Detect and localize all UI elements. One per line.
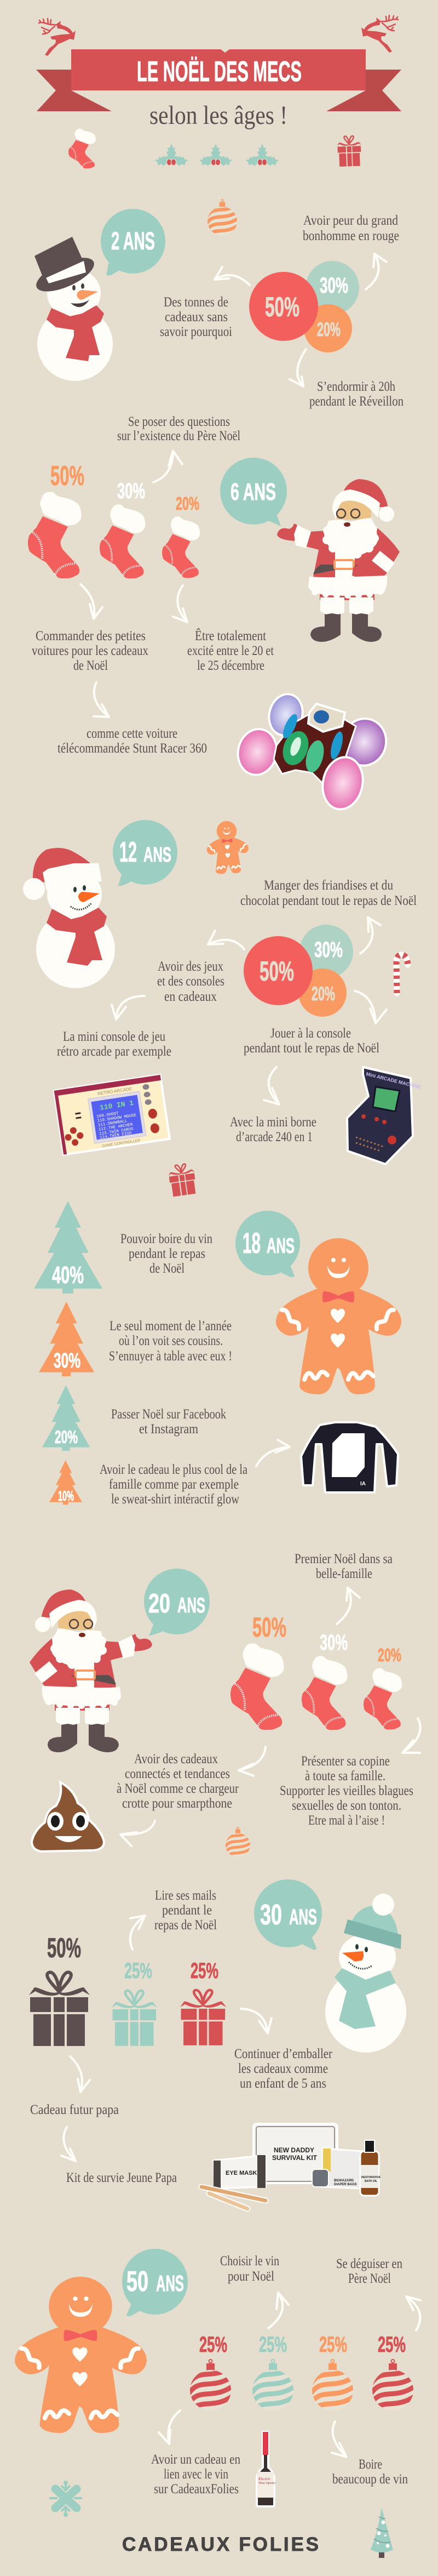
text blocks: et Instagram — [139, 1422, 198, 1437]
product: new daddy survival kit: SURVIVAL KIT — [272, 2154, 318, 2162]
text blocks: le 25 décembre — [197, 658, 264, 673]
speech bubble 12 ans: ANS — [143, 844, 171, 867]
product: wine bottle opener: Electric — [258, 2477, 271, 2481]
stockings chart: 50% — [252, 1612, 286, 1643]
icon: small gingerbread — [205, 820, 250, 875]
icon: orange bauble — [224, 1827, 252, 1866]
icon: orange bauble — [205, 200, 239, 247]
stockings chart — [230, 1612, 402, 1730]
product: mini arcade cabinet — [347, 1067, 422, 1164]
text blocks: excité entre le 20 et — [187, 643, 274, 658]
icon: starred tree — [371, 2507, 393, 2558]
text blocks: S’endormir à 20h — [317, 379, 395, 394]
text blocks: sexuelles de son tonton. — [292, 1798, 401, 1813]
arrows — [120, 1588, 420, 1846]
stockings chart: 30% — [320, 1631, 348, 1655]
text blocks: Manger des friandises et du — [264, 878, 393, 893]
product: retro arcade console: 110.SHADOW MOUSE — [97, 1113, 137, 1124]
baubles chart: 25% — [319, 2333, 347, 2357]
text blocks: beaucoup de vin — [332, 2472, 408, 2487]
icon: reindeer left — [39, 19, 76, 56]
text blocks: S’ennuyer à table avec eux ! — [109, 1349, 232, 1364]
product: wine bottle opener — [257, 2432, 276, 2506]
arrows — [159, 2293, 420, 2457]
text blocks: Premier Noël dans sa — [295, 1552, 393, 1566]
panel: 30 ans — [29, 1879, 406, 2209]
icon: reindeer right — [361, 15, 398, 53]
icon: gift — [167, 1162, 198, 1197]
text blocks — [151, 2254, 408, 2497]
icon: snowflake — [49, 2481, 82, 2517]
product: new daddy survival kit: BATH OIL — [365, 2180, 377, 2183]
text blocks: Avec la mini borne — [230, 1115, 316, 1130]
speech bubble 30 ans: 30 — [260, 1899, 282, 1931]
gifts chart: 25% — [191, 1959, 218, 1983]
panel: 12 ans — [23, 820, 422, 1197]
gingerbread man — [15, 2277, 147, 2433]
product: retro arcade console: RETRO ARCADE — [97, 1086, 132, 1096]
text blocks: d’arcade 240 en 1 — [236, 1130, 313, 1144]
stockings chart: 20% — [378, 1645, 401, 1665]
speech bubble 50 ans — [122, 2249, 188, 2316]
footer logo: CADEAUX FOLIES — [122, 2534, 319, 2555]
text blocks: de Noël — [73, 658, 108, 673]
tree chart: 30% — [54, 1349, 80, 1372]
text blocks: Kit de survie Jeune Papa — [66, 2170, 177, 2185]
speech bubble 12 ans: 12 — [119, 836, 137, 868]
icon: candy cane — [396, 955, 408, 993]
product: retro arcade console — [54, 1075, 170, 1155]
product: glow sweatshirt: IA — [360, 1481, 366, 1487]
text blocks: Etre mal à l’aise ! — [308, 1813, 385, 1828]
speech bubble 20 ans: ANS — [177, 1594, 205, 1617]
tree chart — [34, 1201, 102, 1504]
tree chart: 10% — [58, 1489, 74, 1504]
text blocks — [117, 1552, 413, 1828]
text blocks: Boire — [359, 2457, 382, 2472]
text blocks: où l’on voit ses cousins. — [119, 1333, 223, 1348]
text blocks: pendant le — [162, 1903, 212, 1918]
percent circles: 50% — [260, 956, 294, 987]
text blocks: bonhomme en rouge — [303, 229, 399, 243]
text blocks: pour Noël — [228, 2269, 274, 2284]
title banner — [36, 49, 401, 111]
product: new daddy survival kit: RESTORATIVE — [361, 2176, 381, 2179]
text: question: Se poser des questions — [128, 414, 230, 429]
text blocks: Le seul moment de l’année — [110, 1319, 232, 1333]
baubles chart — [187, 2333, 416, 2426]
panel: 50 ans — [15, 2249, 420, 2517]
product: retro arcade console: 114.TWIN FISH — [100, 1131, 132, 1141]
speech bubble 2 ans — [101, 209, 165, 276]
text blocks: Supporter les vieilles blagues — [280, 1783, 413, 1798]
gifts chart: 50% — [47, 1933, 81, 1963]
speech bubble 12 ans — [113, 820, 177, 886]
gifts chart — [29, 1933, 226, 2046]
speech bubble 6 ans: 6 ANS — [230, 478, 276, 505]
gifts chart: 25% — [124, 1959, 152, 1983]
baubles chart: 25% — [259, 2333, 287, 2357]
text blocks: en cadeaux — [164, 989, 217, 1004]
text blocks: Père Noël — [348, 2271, 391, 2286]
text blocks: pendant le Réveillon — [309, 394, 404, 409]
text blocks: Avoir des cadeaux — [134, 1752, 218, 1766]
stockings chart: 50% — [50, 460, 84, 491]
stockings chart — [28, 460, 200, 578]
icons: holly row — [154, 144, 279, 166]
santa mirrored — [30, 1589, 152, 1752]
product: glow sweatshirt — [301, 1422, 398, 1492]
text blocks: pendant tout le repas de Noël — [244, 1041, 379, 1056]
text blocks: Continuer d’emballer — [234, 2047, 333, 2061]
text blocks: rétro arcade par exemple — [57, 1044, 171, 1059]
text blocks: un enfant de 5 ans — [240, 2076, 326, 2091]
text blocks: à Noël comme ce chargeur — [117, 1781, 239, 1796]
percent circles: 20% — [312, 983, 335, 1005]
product: new daddy survival kit: BIOHAZARD — [334, 2179, 354, 2182]
stockings chart: 20% — [176, 493, 199, 514]
text blocks: Cadeau futur papa — [30, 2102, 119, 2117]
product: retro arcade console: 112.THE ARCHER — [99, 1122, 134, 1132]
text blocks: télécommandée Stunt Racer 360 — [57, 741, 207, 756]
panel: 6 ans — [28, 414, 400, 813]
baubles chart: 25% — [199, 2333, 227, 2357]
speech bubble 18 ans: ANS — [267, 1234, 295, 1258]
text blocks: Avoir un cadeau en — [151, 2452, 240, 2467]
text blocks: de Noël — [149, 1261, 185, 1276]
text blocks: La mini console de jeu — [63, 1029, 165, 1044]
text blocks: à toute sa famille. — [305, 1769, 385, 1783]
product: retro arcade console: 111.SNOWBALL — [97, 1119, 128, 1128]
product: poop emoji charger — [32, 1782, 104, 1851]
baubles chart: 25% — [378, 2333, 406, 2357]
percent circles: 20% — [317, 319, 341, 340]
panel: 18 ans — [34, 1201, 401, 1507]
text: question — [117, 414, 240, 443]
text blocks: comme cette voiture — [87, 726, 177, 741]
text blocks: famille comme par exemple — [109, 1477, 239, 1492]
tree chart: 20% — [55, 1427, 78, 1447]
product: retro arcade console: 113.TWIN CARDS — [99, 1127, 134, 1137]
speech bubble 18 ans — [235, 1211, 300, 1277]
text blocks: Pouvoir boire du vin — [120, 1232, 212, 1246]
text blocks: Commander des petites — [36, 629, 146, 643]
product: retro arcade console: 109.SHOOT — [96, 1112, 119, 1119]
gingerbread man — [276, 1238, 401, 1394]
speech bubble 50 ans: ANS — [156, 2271, 184, 2296]
percent circles — [249, 261, 359, 352]
arrow — [256, 1440, 290, 1466]
product: new daddy survival kit: EYE MASK — [226, 2170, 257, 2176]
product: mini arcade cabinet: Mini ARCADE MACHINE — [366, 1071, 422, 1090]
snowman with santa hat — [23, 848, 115, 988]
text blocks: Jouer à la console — [270, 1026, 351, 1041]
text blocks: cadeaux sans — [165, 310, 228, 324]
panel: 2 ans — [32, 209, 404, 409]
text blocks: Présenter sa copine — [301, 1754, 390, 1769]
stockings chart: 30% — [117, 479, 145, 503]
text blocks: les cadeaux comme — [238, 2061, 328, 2076]
text blocks — [100, 1232, 247, 1507]
text blocks — [30, 1888, 333, 2185]
product: wine bottle opener: Wine Opener — [258, 2482, 276, 2485]
text blocks — [32, 628, 274, 756]
percent circles — [244, 925, 353, 1017]
speech bubble 30 ans: ANS — [289, 1905, 317, 1929]
text blocks: Se déguiser en — [336, 2256, 402, 2271]
percent circles: 30% — [314, 938, 343, 962]
percent circles: 30% — [320, 273, 348, 298]
text blocks: savoir pourquoi — [160, 324, 232, 339]
text blocks: le sweat-shirt intéractif glow — [111, 1492, 239, 1507]
tree chart: 40% — [52, 1262, 84, 1289]
text blocks: et des consoles — [157, 974, 224, 989]
text blocks: voitures pour les cadeaux — [32, 643, 148, 658]
arrows — [215, 254, 387, 386]
snowman with top hat — [32, 237, 113, 381]
text blocks: pendant le repas — [129, 1246, 205, 1261]
text blocks: belle-famille — [316, 1566, 372, 1581]
text blocks: repas de Noël — [154, 1918, 217, 1933]
product: new daddy survival kit — [201, 2124, 381, 2209]
text blocks: connectés et tendances — [125, 1766, 230, 1781]
text blocks: Choisir le vin — [220, 2254, 279, 2269]
snowman with teal hat — [325, 1894, 406, 2053]
text blocks: Avoir peur du grand — [303, 213, 398, 228]
text: question: sur l’existence du Père Noël — [117, 429, 240, 443]
title text: LE NOËL DES MECS — [137, 56, 302, 88]
text blocks: lien avec le vin — [164, 2467, 228, 2482]
text blocks — [57, 878, 417, 1144]
speech bubble 50 ans: 50 — [126, 2266, 148, 2298]
icon: small gift — [337, 135, 362, 167]
arrows — [61, 1916, 272, 2161]
text blocks: Passer Noël sur Facebook — [111, 1407, 226, 1422]
text blocks: Avoir le cadeau le plus cool de la — [100, 1462, 247, 1477]
arrows — [112, 917, 387, 1104]
santa — [277, 479, 400, 642]
subtitle: selon les âges ! — [149, 101, 287, 130]
speech bubble 6 ans — [220, 458, 287, 526]
icon: small stocking — [68, 129, 96, 168]
product: retro arcade console: GAME CONTROLLER — [102, 1139, 141, 1148]
text blocks: Avoir des jeux — [158, 959, 223, 974]
speech bubble 2 ans: 2 ANS — [111, 227, 155, 255]
text blocks — [160, 213, 404, 409]
text blocks: Lire ses mails — [155, 1888, 216, 1903]
arrows — [80, 451, 187, 717]
speech bubble 30 ans — [254, 1879, 322, 1950]
percent circles: 50% — [265, 292, 299, 322]
text blocks: sur CadeauxFolies — [154, 2482, 239, 2497]
panel: 20 ans — [30, 1552, 420, 1866]
product: retro arcade console: 110 IN 1 — [99, 1099, 134, 1112]
text blocks: crotte pour smarpthone — [122, 1796, 232, 1811]
product: new daddy survival kit: DIAPER BAGS — [334, 2183, 357, 2186]
product: stunt racer toy car — [234, 691, 391, 813]
text blocks: Être totalement — [195, 628, 266, 643]
speech bubble 20 ans — [144, 1569, 210, 1636]
speech bubble 18 ans: 18 — [243, 1227, 261, 1259]
speech bubble 20 ans: 20 — [148, 1589, 170, 1618]
product: new daddy survival kit: NEW DADDY — [274, 2146, 314, 2154]
text blocks: Des tonnes de — [164, 295, 228, 310]
